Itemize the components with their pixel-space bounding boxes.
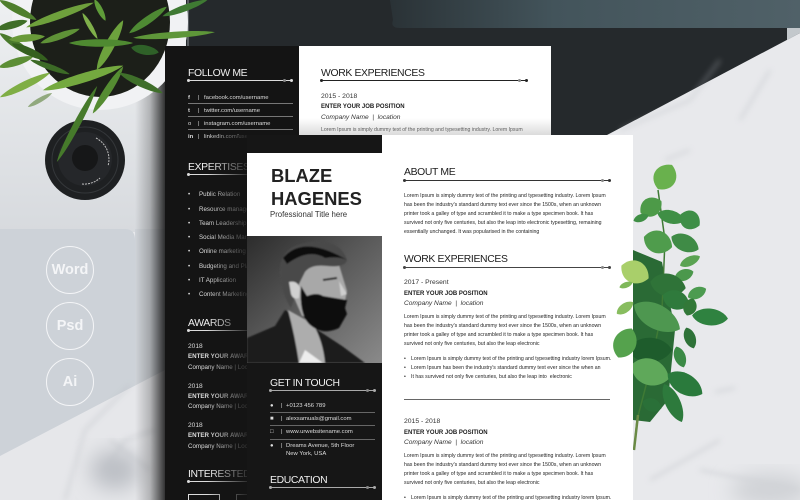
contact list: social — [188, 95, 293, 140]
list: awards: 2018 — [188, 422, 203, 429]
list: expertises: Content Marketing — [199, 291, 250, 298]
contact list: social: twitter.com/username — [204, 108, 260, 114]
contact list: social: | — [198, 134, 200, 140]
illustration: basil plant — [627, 159, 729, 450]
list: expertises: • — [188, 277, 190, 284]
text: about me — [404, 193, 606, 235]
list: awards: ENTER YOUR AWARD — [188, 353, 253, 360]
list: expertises: Social Media Marketing — [199, 234, 263, 241]
contact list: ■ — [270, 416, 274, 422]
list: expertises: • — [188, 206, 190, 213]
list: expertises: • — [188, 220, 190, 227]
list: expertises: • — [188, 234, 190, 241]
job entry 1: Company Name | location — [404, 300, 483, 307]
list: expertises: • — [188, 248, 190, 255]
list: awards: Company Name | Location — [188, 403, 261, 410]
heading: work experiences: WORK EXPERIENCES — [321, 68, 425, 79]
contact list: | — [281, 429, 283, 435]
list: expertises: Public Relation — [199, 191, 240, 198]
list: awards: 2018 — [188, 383, 203, 390]
job entry 1: Lorem Ipsum has been the industry's standard dummy text ever since the when an — [411, 365, 601, 371]
contact list: New York, USA — [286, 450, 326, 456]
job entry 2: Lorem Ipsum is simply dummy text of the printing and typesetting industry. Lorem Ipsum — [404, 453, 606, 459]
contact list: | — [281, 403, 283, 409]
job entry 2: printer took a galley of type and scrambled it to make a type specimen book. It has — [404, 471, 593, 477]
job entry 2: survived not only five centuries, but also the leap electronic — [404, 480, 540, 486]
list: awards — [188, 343, 261, 450]
text: about me: essentially unchanged. It was popularised in the containing — [404, 229, 539, 235]
contact list: social: f — [188, 95, 190, 101]
list: expertises: Budgeting and Planning — [199, 263, 265, 270]
contact list: | — [281, 416, 283, 422]
job entry 2: has been the industry's standard dummy text ever since the 1500s, when an unknown — [404, 462, 601, 468]
contact list: □ — [270, 429, 274, 435]
heading: about me: ABOUT ME — [404, 167, 455, 178]
job entry 2 — [404, 418, 611, 500]
heading: work experiences: WORK EXPERIENCES — [404, 254, 508, 265]
job entry 1: has been the industry's standard dummy text ever since the 1500s, when an unknown — [404, 323, 601, 329]
list: expertises: Resource management — [199, 206, 263, 213]
job title: Professional Title here — [270, 210, 347, 219]
list: awards: Company Name | Location — [188, 443, 261, 450]
contact list: social: linkedin.com/username — [204, 134, 265, 140]
panel: front resume main — [382, 135, 633, 500]
heading: education: EDUCATION — [270, 475, 327, 486]
contact list: alexsamuals@gmail.com — [286, 416, 352, 422]
job entry 1: survived not only five centuries, but also the leap electronic — [404, 341, 540, 347]
shadow on back sidebar — [207, 135, 247, 500]
text: about me: Lorem Ipsum is simply dummy text of the printing and typesetting industry. Lorem Ipsum — [404, 193, 606, 199]
icon: camera lens — [45, 84, 125, 200]
badge: Ai: Ai — [63, 374, 77, 390]
contact list: www.urwebsitename.com — [286, 429, 353, 435]
name — [271, 165, 362, 209]
job entry 1: printer took a galley of type and scrambled it to make a type specimen book. It has — [404, 332, 593, 338]
job entry: 2015 - 2018 — [321, 93, 357, 100]
job entry 2: ENTER YOUR JOB POSITION — [404, 430, 488, 436]
job entry 2: Company Name | location — [404, 439, 483, 446]
job entry: Company Name | location — [321, 114, 400, 121]
job entry 2: 2015 - 2018 — [404, 418, 440, 425]
contact list: Dreams Avenue, 5th Floor — [286, 443, 354, 449]
heading: awards: AWARDS — [188, 318, 231, 329]
contact list: social: instagram.com/username — [204, 121, 270, 127]
badge: Psd: Psd — [57, 318, 83, 334]
list: expertises: • — [188, 191, 190, 198]
badge: Word: Word — [52, 262, 88, 278]
panel: back resume sidebar — [165, 46, 299, 500]
contact list: social: t — [188, 108, 190, 114]
list: awards: Company Name | Location — [188, 364, 261, 371]
name: HAGENES — [271, 188, 362, 209]
icon boxes: interests — [188, 494, 247, 500]
list: expertises: Online marketing — [199, 248, 246, 255]
badge: Psd — [46, 302, 94, 350]
list: expertises — [188, 191, 265, 298]
list: awards: 2018 — [188, 343, 203, 350]
job entry 1: • — [404, 356, 406, 362]
contact list: social: | — [198, 108, 200, 114]
badge: Ai — [46, 358, 94, 406]
contact list: ● — [270, 403, 274, 409]
panel: front resume dark column — [247, 135, 382, 500]
job entry 1 — [404, 279, 611, 380]
heading: interested: INTERESTED — [188, 469, 250, 480]
text: about me: printer took a galley of type and scrambled it to make a type specimen book. It has — [404, 211, 593, 217]
job entry 1: • — [404, 374, 406, 380]
list: expertises: • — [188, 263, 190, 270]
photo: portrait — [247, 236, 382, 363]
list: expertises: • — [188, 291, 190, 298]
job entry: Lorem Ipsum is simply dummy text of the printing and typesetting industry. Lorem Ipsum — [321, 127, 523, 133]
list: expertises: Team Leadership — [199, 220, 246, 227]
contact list: ● — [270, 443, 274, 449]
job entry 1: Lorem Ipsum is simply dummy text of the printing and typesetting industry lorem Ipsum. — [411, 356, 611, 362]
contact list: social: facebook.com/username — [204, 95, 269, 101]
contact list: | — [281, 443, 283, 449]
name block — [247, 153, 382, 236]
contact list: social: in — [188, 134, 193, 140]
contact list — [270, 403, 375, 456]
panel: back resume main — [299, 46, 551, 135]
heading: expertises: EXPERTISES — [188, 162, 250, 173]
heading: get in touch: GET IN TOUCH — [270, 378, 340, 389]
text: about me: survived not only five centuries, but also the leap into electronic typesetting, remaining — [404, 220, 602, 226]
job entry — [321, 93, 523, 133]
text: about me: has been the industry's standard dummy text ever since the 1500s, when an unknown — [404, 202, 601, 208]
icon: plant pot — [0, 0, 215, 116]
contact list: social: o — [188, 121, 191, 127]
contact list: social: | — [198, 121, 200, 127]
badge: Word — [46, 246, 94, 294]
heading: follow me: FOLLOW ME — [188, 68, 247, 79]
list: awards: ENTER YOUR AWARD — [188, 393, 253, 400]
job entry 1: ENTER YOUR JOB POSITION — [404, 291, 488, 297]
job entry 1: It has survived not only five centuries, but also the leap into electronic — [411, 374, 572, 380]
name: BLAZE — [271, 165, 332, 186]
list: awards: ENTER YOUR AWARD — [188, 432, 253, 439]
job entry 1: • — [404, 365, 406, 371]
contact list: +0123 456 789 — [286, 403, 325, 409]
job entry 1: Lorem Ipsum is simply dummy text of the printing and typesetting industry. Lorem Ipsum — [404, 314, 606, 320]
job entry: ENTER YOUR JOB POSITION — [321, 104, 405, 110]
contact list: social: | — [198, 95, 200, 101]
list: expertises: IT Application — [199, 277, 236, 284]
job entry 1: 2017 - Present — [404, 279, 449, 286]
